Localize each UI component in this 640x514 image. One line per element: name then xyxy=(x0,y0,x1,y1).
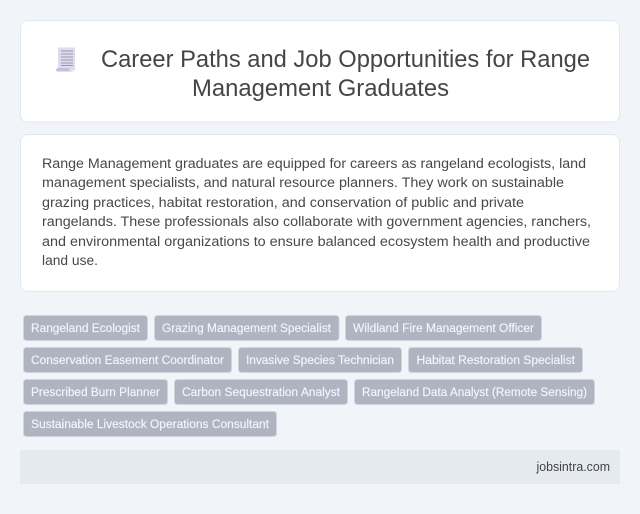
tag: Prescribed Burn Planner xyxy=(31,385,160,399)
title: Career Paths and Job Opportunities for Range xyxy=(101,46,590,73)
tag xyxy=(346,316,542,340)
title xyxy=(101,46,590,102)
footer source text: jobsintra.com xyxy=(536,460,610,474)
tag: Rangeland Ecologist xyxy=(31,321,141,335)
tag xyxy=(24,412,276,436)
description text: rangelands. These professionals also collaborate with government agencies, ranchers, xyxy=(42,214,591,230)
tag xyxy=(354,380,594,404)
tag xyxy=(408,348,582,372)
footer bar xyxy=(20,450,620,484)
tag: Wildland Fire Management Officer xyxy=(353,321,534,335)
tag xyxy=(24,348,232,372)
tag: Invasive Species Technician xyxy=(246,353,394,367)
tag: Habitat Restoration Specialist xyxy=(416,353,576,367)
tag xyxy=(24,316,148,340)
tag: Carbon Sequestration Analyst xyxy=(182,385,341,399)
description text: grazing practices, habitat restoration, and conservation of public and private xyxy=(42,195,524,211)
tag: Conservation Easement Coordinator xyxy=(31,353,224,367)
tag: Grazing Management Specialist xyxy=(162,321,332,335)
tag xyxy=(154,316,339,340)
tag list xyxy=(24,316,594,436)
tag xyxy=(174,380,348,404)
description text: and environmental organizations to ensure balanced ecosystem health and productive xyxy=(42,234,590,250)
panel: description xyxy=(20,134,620,292)
description text: Range Management graduates are equipped for careers as rangeland ecologists, land xyxy=(42,156,586,172)
panel: header xyxy=(20,20,620,122)
tag: Rangeland Data Analyst (Remote Sensing) xyxy=(362,385,587,399)
tag xyxy=(24,380,168,404)
description text: land use. xyxy=(42,253,98,269)
description text xyxy=(42,156,591,269)
tag xyxy=(238,348,402,372)
icon: document scroll xyxy=(56,48,75,72)
tag: Sustainable Livestock Operations Consultant xyxy=(31,417,270,431)
title: Management Graduates xyxy=(192,75,449,102)
description text: management specialists, and natural resource planners. They work on sustainable xyxy=(42,175,564,191)
